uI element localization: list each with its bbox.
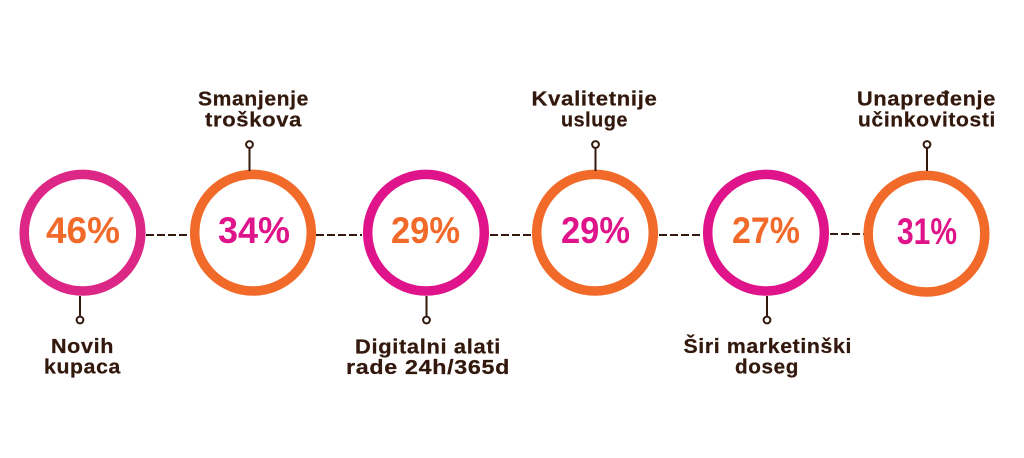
pin — [924, 141, 930, 171]
value: 46% — [46, 210, 120, 251]
value: 27% — [732, 210, 800, 251]
value: 34% — [218, 210, 290, 251]
label: Unapređenje — [857, 88, 996, 110]
label: rade 24h/365d — [346, 357, 510, 379]
label: učinkovitosti — [858, 110, 996, 132]
label: usluge — [561, 110, 628, 132]
ring — [195, 174, 311, 291]
label — [346, 336, 510, 379]
connector lines — [146, 234, 864, 235]
label: Kvalitetnije — [532, 88, 658, 110]
label — [684, 334, 852, 378]
label: troškova — [205, 110, 302, 132]
label: Digitalni alati — [355, 336, 501, 358]
pin — [77, 296, 83, 323]
label: Smanjenje — [198, 88, 309, 110]
label — [857, 88, 996, 132]
label: Širi marketinški — [684, 334, 852, 358]
ring — [868, 175, 985, 292]
value: 29% — [391, 210, 460, 251]
item: 34% smanjenje troskova — [195, 88, 311, 291]
ring — [24, 174, 141, 291]
label: kupaca — [44, 356, 121, 378]
ring — [368, 174, 484, 291]
value: 31% — [897, 211, 957, 252]
pin — [764, 296, 770, 323]
pin — [592, 141, 599, 171]
ring — [708, 174, 824, 291]
pin — [246, 141, 253, 171]
label — [44, 336, 121, 378]
ring — [537, 174, 653, 291]
item: 29% kvalitetnije usluge — [532, 88, 658, 291]
pin — [423, 296, 430, 323]
item: 29% digitalni alati — [346, 174, 510, 379]
label — [532, 88, 658, 132]
item: 27% siri marketinski doseg — [684, 174, 852, 378]
item: 46% novih kupaca — [24, 174, 141, 378]
label — [198, 88, 309, 132]
item: 31% unapredenje ucinkovitosti — [857, 88, 996, 292]
label: Novih — [51, 336, 114, 358]
label: doseg — [735, 356, 799, 378]
value: 29% — [561, 210, 630, 251]
